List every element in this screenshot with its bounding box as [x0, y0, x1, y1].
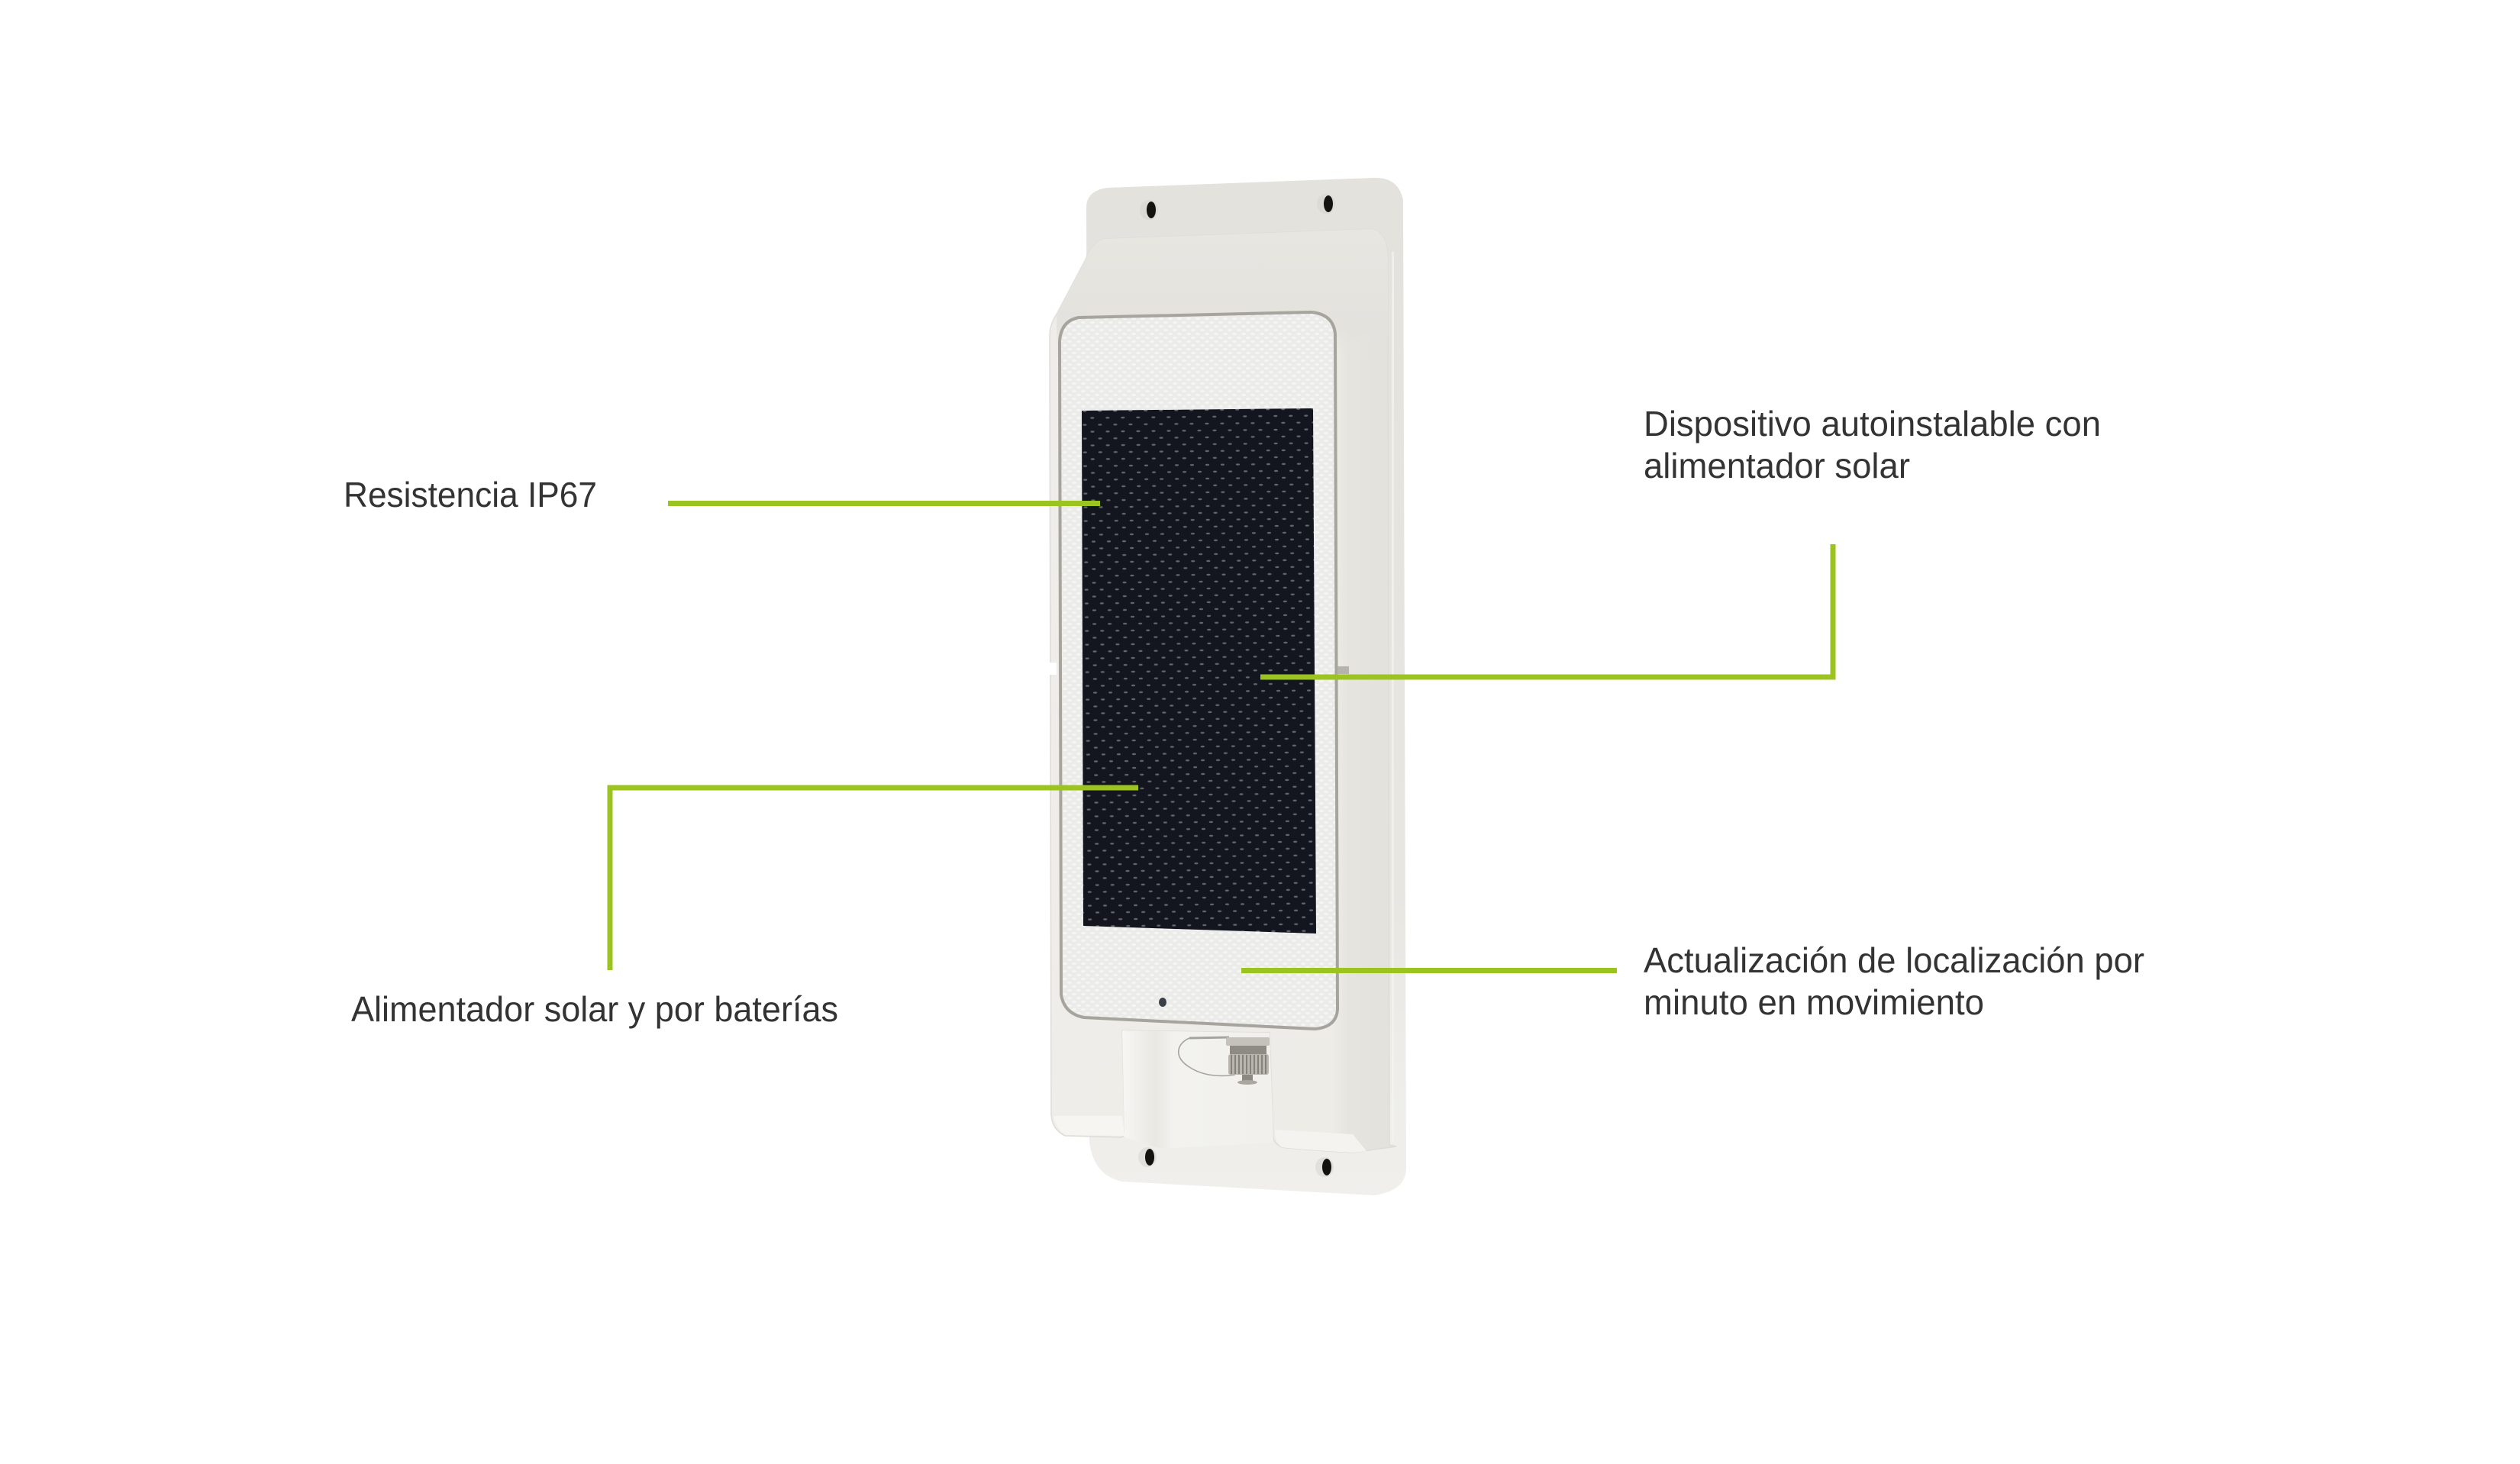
left side notch — [1050, 663, 1057, 675]
label: Actualización de localización por minuto en movimiento — [1644, 940, 2144, 1022]
label: Resistencia IP67: Resistencia IP67 — [344, 475, 597, 514]
label: Actualización de localización por minuto en movimiento: Actualización de localización por — [1644, 940, 2144, 980]
callout line: Resistencia IP67 — [668, 501, 1100, 506]
solar cell — [1082, 408, 1316, 934]
back mounting plate — [1086, 178, 1406, 1195]
mounting holes — [1138, 194, 1335, 1177]
sensor dot — [1159, 998, 1166, 1007]
connector with wire — [1179, 1037, 1270, 1085]
label: Dispositivo autoinstalable con alimentador solar — [1644, 404, 2101, 485]
callout line: Actualización — [1241, 968, 1617, 973]
device: solar tracker — [1050, 178, 1406, 1195]
label: Alimentador solar y por baterías: Alimentador solar y por baterías — [351, 989, 838, 1029]
front housing — [1050, 229, 1396, 1153]
label: Dispositivo autoinstalable con alimentador solar: Dispositivo autoinstalable con — [1644, 404, 2101, 443]
label: Actualización de localización por minuto en movimiento: minuto en movimiento — [1644, 982, 1984, 1022]
housing top hood — [1057, 229, 1388, 359]
glass panel — [1060, 312, 1337, 1029]
callout line: Dispositivo autoinstalable — [1260, 544, 1833, 677]
callout line: Alimentador solar — [610, 788, 1138, 970]
small side tab — [1337, 666, 1349, 674]
lower highlights on housing blocks — [1053, 1116, 1366, 1153]
plate side highlight — [1392, 252, 1394, 1141]
label: Dispositivo autoinstalable con alimentador solar: alimentador solar — [1644, 446, 1910, 485]
connector recess — [1122, 1030, 1273, 1149]
